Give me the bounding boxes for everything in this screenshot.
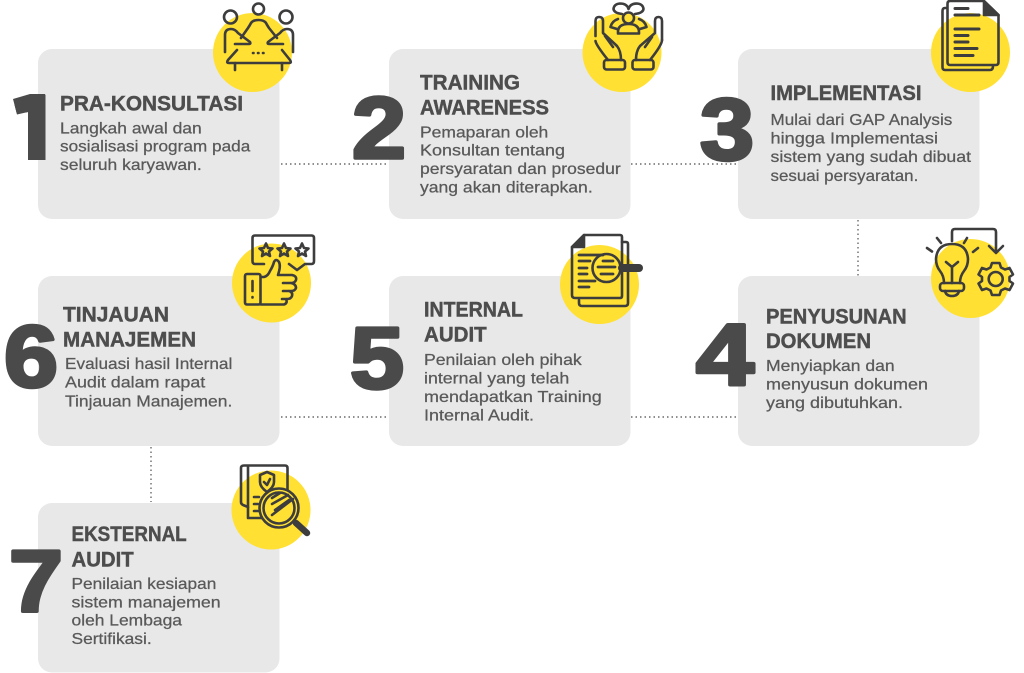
description 7: sistem manajemen	[72, 594, 221, 611]
description 6: Tinjauan Manajemen.	[65, 393, 232, 410]
description 4	[766, 358, 928, 412]
heading 3: IMPLEMENTASI	[770, 82, 922, 105]
number 1: 1	[4, 80, 56, 177]
icon: certificate under magnifier	[232, 466, 310, 550]
step 2: training awareness	[352, 4, 662, 219]
step 3: implementasi	[700, 1, 1010, 219]
description 5: Penilaian oleh pihak	[424, 352, 582, 369]
number 6: 6	[4, 308, 58, 406]
step 7: eksternal audit	[9, 466, 310, 672]
description 2: yang akan diterapkan.	[420, 180, 593, 196]
description 1: Langkah awal dan	[60, 120, 202, 137]
description 7	[72, 576, 221, 648]
step 6: tinjauan manajemen	[4, 236, 314, 446]
description 7: oleh Lembaga	[72, 613, 182, 630]
number 4: 4	[696, 306, 754, 404]
heading 4: DOKUMEN	[766, 330, 871, 353]
description 4: yang dibutuhkan.	[766, 395, 903, 412]
description 3: hingga Implementasi	[770, 130, 938, 148]
description 2: persyaratan dan prosedur	[420, 161, 621, 178]
number 2: 2	[352, 80, 406, 177]
card 7	[38, 503, 280, 672]
number 3: 3	[700, 82, 754, 178]
description 2	[420, 124, 621, 196]
icon: hands holding people	[582, 4, 662, 92]
description 3	[770, 112, 972, 185]
heading 1: PRA-KONSULTASI	[60, 92, 243, 116]
description 4: Menyiapkan dan	[766, 358, 895, 375]
description 6: Evaluasi hasil Internal	[65, 356, 232, 373]
number 5: 5	[350, 310, 404, 407]
description 7: Penilaian kesiapan	[72, 576, 216, 593]
description 5: mendapatkan Training	[424, 389, 602, 406]
icon: document review	[560, 235, 639, 324]
description 3: sistem yang sudah dibuat	[770, 149, 972, 166]
description 3: sesuai persyaratan.	[770, 168, 918, 185]
card 2	[389, 49, 630, 219]
description 2: Pemaparan oleh	[420, 124, 548, 141]
heading 6	[63, 304, 196, 351]
description 5: Internal Audit.	[424, 407, 534, 424]
step 1: pra-konsultasi	[4, 4, 293, 219]
icon: thumbs up rating	[232, 236, 314, 322]
card 4	[738, 276, 980, 446]
description 4: menyusun dokumen	[766, 377, 928, 394]
icon: documents	[931, 1, 1010, 92]
description 1	[60, 120, 251, 174]
heading 5: AUDIT	[424, 324, 487, 347]
description 7: Sertifikasi.	[72, 631, 152, 648]
heading 2: AWARENESS	[420, 96, 549, 120]
card 6	[38, 276, 280, 446]
number 7: 7	[9, 533, 63, 630]
heading 7: EKSTERNAL	[72, 523, 187, 546]
description 6: Audit dalam rapat	[65, 375, 206, 392]
step 4: penyusunan dokumen	[696, 229, 1013, 446]
description 5: internal yang telah	[424, 370, 569, 387]
heading 4	[766, 306, 907, 353]
heading 6: TINJAUAN	[63, 304, 169, 327]
description 2: Konsultan tentang	[420, 143, 565, 160]
card 5	[389, 276, 630, 446]
card 3	[738, 49, 980, 219]
dotted connectors	[151, 164, 858, 502]
heading 2: TRAINING	[420, 72, 520, 94]
description 3: Mulai dari GAP Analysis	[770, 112, 952, 129]
heading 6: MANAJEMEN	[63, 328, 196, 351]
heading 7: AUDIT	[72, 548, 134, 571]
description 1: seluruh karyawan.	[60, 157, 202, 174]
icon: light bulb and gear	[927, 229, 1013, 318]
step 5: internal audit	[350, 235, 639, 446]
heading 5: INTERNAL	[424, 299, 523, 322]
heading 2	[420, 72, 549, 120]
heading 7	[72, 523, 187, 571]
icon: meeting table	[213, 4, 293, 92]
heading 5	[424, 299, 523, 347]
description 6	[65, 356, 232, 410]
card 1	[38, 49, 280, 219]
heading 4: PENYUSUNAN	[766, 306, 907, 328]
description 1: sosialisasi program pada	[60, 139, 251, 156]
description 5	[424, 352, 602, 424]
